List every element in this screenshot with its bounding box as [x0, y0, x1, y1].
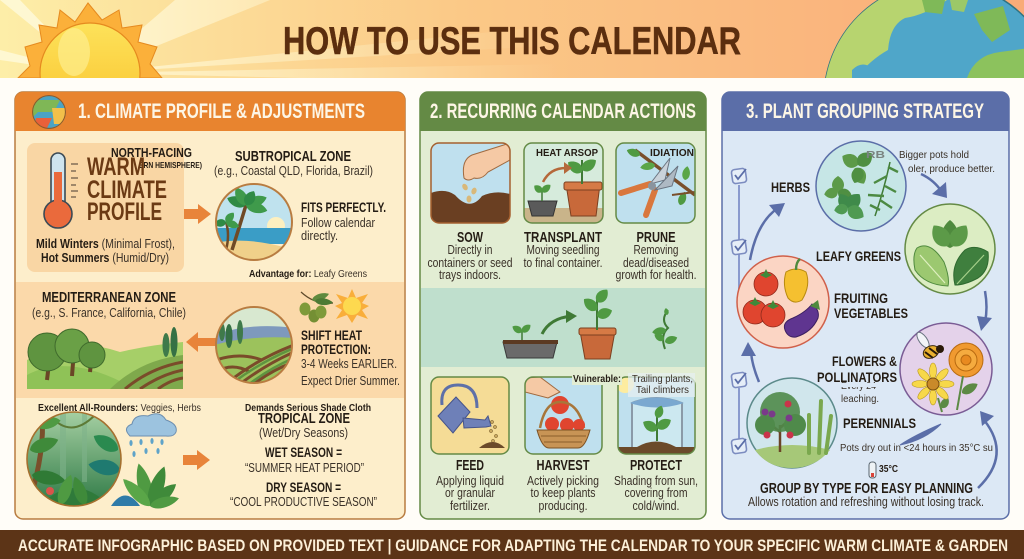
- tropical seasons: DRY SEASON =: [266, 479, 341, 495]
- subtropical note: [301, 199, 386, 243]
- tropical seasons: “SUMMER HEAT PERIOD”: [245, 461, 364, 475]
- note: bigger pots: Bigger pots hold: [899, 149, 969, 161]
- circle: fruiting vegetables: [737, 256, 829, 348]
- mediterranean note: [301, 327, 400, 388]
- icon: globe: [825, 0, 1024, 78]
- overlay text: vulnerable: Vuinerable:: [573, 373, 621, 385]
- warm climate box: Hot Summers (Humid/Dry): [41, 251, 169, 265]
- overlay text: vulnerable: Tail climbers: [636, 384, 689, 396]
- panel header: [420, 92, 706, 131]
- overlay text: heat absorption: HEAT ARSOP: [536, 147, 598, 159]
- sun rays: [0, 0, 487, 78]
- warm climate box: [27, 143, 202, 272]
- illustration: climbing plant: [652, 308, 678, 349]
- checklist upper: [731, 168, 747, 292]
- panel: recurring calendar actions: [420, 92, 706, 519]
- label: prune: growth for health.: [616, 268, 696, 282]
- icon: olives: [300, 291, 333, 322]
- tile: sow: [431, 143, 510, 223]
- icon: farm fields: [214, 305, 294, 385]
- heading: warm climate profile: [87, 153, 167, 226]
- arrow: herbs to leafy greens: [921, 174, 947, 198]
- label: fruiting vegetables: [834, 290, 908, 321]
- label: sow: SOW: [457, 229, 484, 246]
- label: feed: or granular: [445, 486, 495, 500]
- arrow: to tropical: [183, 450, 210, 470]
- mediterranean note: SHIFT HEAT: [301, 327, 362, 343]
- mediterranean note: 3-4 Weeks EARLIER.: [301, 357, 397, 371]
- overlay text: herb fragment: RB: [866, 149, 886, 161]
- icon: sun: [17, 2, 162, 78]
- heading: warm climate profile: WARM: [87, 153, 145, 181]
- subtropical note: FITS PERFECTLY.: [301, 199, 386, 215]
- circle: perennials: [747, 378, 837, 468]
- panel title: 1. CLIMATE PROFILE & ADJUSTMENTS: [78, 100, 365, 123]
- label: protect: Shading from sun,: [614, 474, 698, 488]
- mediterranean examples: (e.g., S. France, California, Chile): [32, 306, 186, 320]
- label: hemisphere: ERN HEMISPHERE): [139, 160, 202, 170]
- label: prune: dead/diseased: [623, 256, 689, 270]
- panel header: [722, 92, 1009, 131]
- label: harvest: producing.: [538, 499, 588, 513]
- heading: warm climate profile: PROFILE: [87, 198, 162, 226]
- label: protect: cold/wind.: [632, 499, 680, 513]
- subtropical note: Follow calendar: [301, 216, 375, 230]
- circle: flowers and pollinators: [900, 323, 992, 415]
- label: protect: covering from: [624, 486, 688, 500]
- label: harvest: HARVEST: [536, 457, 590, 474]
- panel header: [15, 92, 405, 131]
- note: all-rounders: Excellent All-Rounders: Veggies, Herbs: [38, 402, 201, 414]
- group by type description: Allows rotation and refreshing without losing track.: [748, 495, 984, 509]
- tile: prune: [616, 143, 695, 223]
- note: every 24 fragment: leaching.: [841, 393, 879, 405]
- overlay text: vulnerable: [572, 373, 695, 397]
- label: transplant: to final container.: [524, 256, 602, 270]
- panel title: 2. RECURRING CALENDAR ACTIONS: [430, 100, 696, 123]
- tropical heading: TROPICAL ZONE: [258, 410, 350, 427]
- subtropical examples: (e.g., Coastal QLD, Florida, Brazil): [214, 164, 373, 178]
- advantage note: Advantage for: Leafy Greens: [249, 268, 367, 280]
- title: HOW TO USE THIS CALENDAR: [283, 20, 741, 63]
- label: perennials: PERENNIALS: [843, 415, 916, 431]
- overlay text: radiation: IDIATION: [650, 147, 694, 159]
- mediterranean note: PROTECTION:: [301, 341, 371, 357]
- tropical seasons: “COOL PRODUCTIVE SEASON”: [230, 495, 377, 509]
- icon: small sun: [335, 289, 369, 323]
- panel: climate profile: [15, 92, 405, 519]
- band: seedling strip: [421, 288, 705, 367]
- label: leafy greens: LEAFY GREENS: [816, 248, 901, 264]
- climate description: Mild Winters (Minimal Frost),: [36, 237, 175, 251]
- circle: herbs: [816, 141, 906, 231]
- arrow: to subtropical: [184, 204, 211, 224]
- arrow: bottom to flowers: [978, 411, 997, 488]
- note: every 24 fragment: [841, 380, 879, 405]
- label: prune: Removing: [634, 243, 679, 257]
- icon: rain cloud: [126, 414, 176, 457]
- tile: transplant: [524, 143, 603, 223]
- icon: palm beach: [214, 182, 294, 262]
- icon: thermometer: [44, 153, 78, 228]
- overlay text: vulnerable: Trailing plants,: [632, 373, 693, 385]
- label: harvest: to keep plants: [530, 486, 596, 500]
- header banner: [0, 0, 1024, 78]
- note: bigger pots: oler, produce better.: [908, 163, 995, 175]
- label: transplant: TRANSPLANT: [524, 229, 602, 246]
- label: feed: [436, 457, 504, 513]
- note: bigger pots: [899, 149, 995, 175]
- icon: jungle: [27, 412, 121, 507]
- label: fruiting vegetables: VEGETABLES: [834, 305, 908, 321]
- checklist lower: [731, 372, 747, 454]
- label: prune: [616, 229, 696, 282]
- label: feed: Applying liquid: [436, 474, 504, 488]
- icon: small globe: [32, 95, 66, 130]
- icon: thermometer 35C: [869, 462, 898, 478]
- icon: bush: [111, 462, 180, 511]
- mediterranean heading: MEDITERRANEAN ZONE: [42, 289, 176, 306]
- heading: warm climate profile: CLIMATE: [87, 176, 167, 204]
- label: feed: fertilizer.: [450, 499, 490, 513]
- label: sow: containers or seed: [428, 256, 513, 270]
- subtropical heading: SUBTROPICAL ZONE: [235, 148, 351, 165]
- note: every 24 fragment: Every 24: [841, 380, 876, 392]
- label: fruiting vegetables: FRUITING: [834, 290, 888, 306]
- icon: thermometer 35C: 35°C: [879, 463, 898, 475]
- arrow: perennials to fruit: [741, 342, 759, 382]
- label: flowers and pollinators: POLLINATORS: [817, 369, 897, 385]
- label: feed: FEED: [456, 457, 484, 474]
- label: sow: [428, 229, 513, 282]
- tropical seasons: [230, 444, 377, 509]
- label: harvest: [527, 457, 599, 513]
- label: flowers and pollinators: FLOWERS &: [832, 353, 897, 369]
- label: protect: [614, 457, 698, 513]
- illustration: mediterranean landscape: [27, 327, 183, 389]
- label: sow: Directly in: [448, 243, 493, 257]
- illustration: seedling moved to pot: [503, 286, 616, 359]
- label: transplant: Moving seedling: [526, 243, 600, 257]
- tile: feed: [431, 377, 509, 454]
- footer bar: [0, 530, 1024, 559]
- label: transplant: [524, 229, 602, 270]
- panel: plant grouping strategy: [722, 92, 1009, 519]
- label: protect: PROTECT: [630, 457, 682, 474]
- tile: harvest: [525, 377, 602, 454]
- band: mediterranean background: [16, 282, 404, 398]
- label: flowers and pollinators: [815, 353, 899, 387]
- tropical subtitle: (Wet/Dry Seasons): [259, 426, 348, 440]
- arrow: to mediterranean: [186, 332, 216, 352]
- subtropical note: directly.: [301, 229, 338, 243]
- tile: protect: [616, 375, 695, 454]
- label: prune: PRUNE: [636, 229, 676, 246]
- label: herbs: HERBS: [771, 179, 810, 195]
- label: north-facing overlap: NORTH-FACING: [111, 145, 192, 160]
- note: shade cloth: Demands Serious Shade Cloth: [245, 402, 371, 414]
- label: sow: trays indoors.: [439, 268, 501, 282]
- tropical seasons: WET SEASON =: [265, 444, 342, 460]
- circle: leafy greens: [905, 204, 995, 294]
- label: harvest: Actively picking: [527, 474, 599, 488]
- arrow: swoosh: [900, 424, 941, 445]
- mediterranean note: Expect Drier Summer.: [301, 374, 400, 388]
- note: pots dry out: Pots dry out in <24 hours in 35°C su: [840, 442, 993, 454]
- arrow: leafy greens to flowers: [977, 291, 992, 331]
- arrow: fruit to herbs: [750, 203, 785, 260]
